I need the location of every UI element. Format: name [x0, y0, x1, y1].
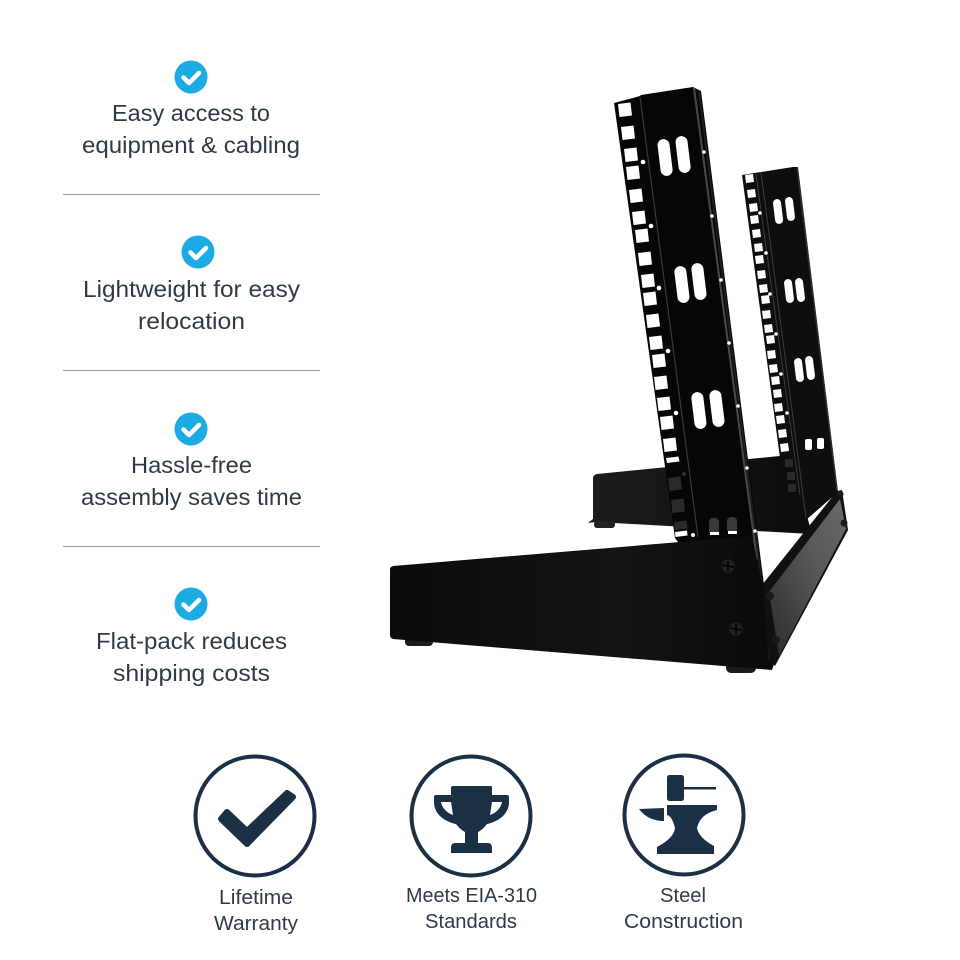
text: easy access: Easy access to: [112, 100, 270, 126]
icon: anvil and hammer in circle: [624, 756, 744, 874]
icon: check in circle: [196, 756, 314, 876]
text: hassle-free: [81, 452, 302, 510]
text: lifetime warranty: Lifetime: [219, 887, 293, 909]
badge: EIA-310 standards: [406, 756, 537, 933]
panel: benefits list: [63, 60, 320, 686]
benefit: lightweight: [83, 236, 300, 334]
panel: feature badges: [196, 756, 744, 935]
text: hassle-free: Hassle-free: [131, 452, 252, 478]
icon: blue check badge: [174, 60, 208, 94]
front base plate: [390, 536, 774, 673]
text: flat-pack: Flat-pack reduces: [96, 628, 287, 654]
icon: blue check badge: [174, 588, 208, 620]
text: meets EIA-310: Standards: [425, 911, 517, 933]
text: flat-pack: shipping costs: [113, 660, 270, 686]
text: lifetime warranty: [214, 887, 298, 935]
text: easy access: equipment & cabling: [82, 132, 300, 158]
icon: blue check badge: [174, 412, 208, 446]
text: steel construction: [624, 885, 743, 933]
text: flat-pack: [96, 628, 287, 686]
benefit: flat-pack: [96, 588, 287, 686]
text: lightweight: relocation: [138, 308, 245, 334]
badge: lifetime warranty: [196, 756, 314, 935]
front brace bar: [762, 490, 848, 666]
text: steel construction: Construction: [624, 911, 743, 933]
back rail: [742, 167, 838, 520]
text: lightweight: Lightweight for easy: [83, 276, 300, 302]
benefit: easy access: [82, 60, 300, 158]
product photo: open frame rack: [390, 87, 848, 673]
icon: blue check badge: [182, 236, 214, 268]
text: hassle-free: assembly saves time: [81, 484, 302, 510]
text: lightweight: [83, 276, 300, 334]
badge: steel construction: [624, 756, 744, 933]
text: easy access: [82, 100, 300, 158]
text: meets EIA-310: Meets EIA-310: [406, 885, 537, 907]
icon: trophy in circle: [412, 756, 530, 876]
front rail: [614, 87, 764, 585]
back base plate: [588, 455, 812, 534]
screws: [721, 559, 743, 636]
benefit: hassle-free: [81, 412, 302, 510]
text: meets EIA-310: [406, 885, 537, 933]
text: lifetime warranty: Warranty: [214, 913, 298, 935]
text: steel construction: Steel: [660, 885, 706, 907]
